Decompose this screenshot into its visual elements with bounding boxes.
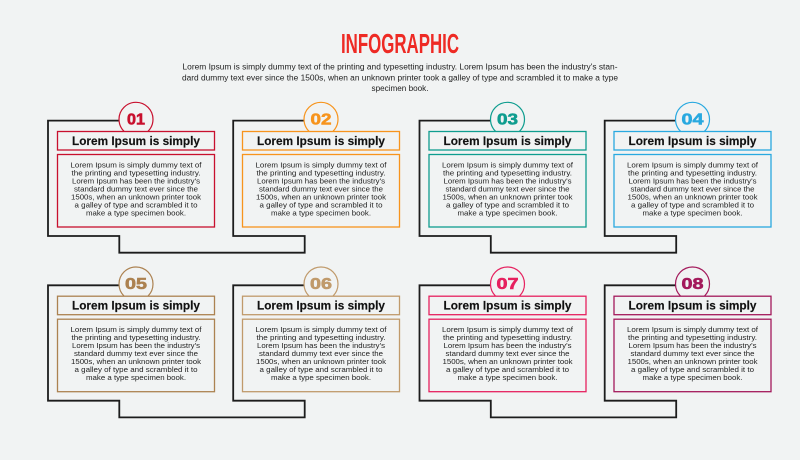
body box 04 (614, 154, 771, 227)
body box 08 (614, 319, 771, 392)
heading box 04: Lorem Ipsum is simply (628, 135, 757, 148)
body box 03: the printing and typesetting industry. (443, 168, 572, 178)
body box 01: 1500s, when an unknown printer took (71, 192, 201, 202)
body box 01: make a type specimen book. (86, 208, 186, 218)
body box 03: Lorem Ipsum has been the industry's (444, 176, 572, 186)
heading box 04 (614, 132, 771, 150)
card 01 (58, 102, 214, 227)
body box 04: make a type specimen book. (642, 208, 742, 218)
number badge 04 (676, 102, 710, 136)
connector: cards 01 and 02 (48, 121, 305, 253)
body box 06: make a type specimen book. (271, 373, 371, 382)
body box 06: a galley of type and scrambled it to (260, 365, 382, 374)
body box 01 (58, 154, 214, 227)
body box 06 (242, 319, 400, 392)
body box 02: 1500s, when an unknown printer took (256, 192, 386, 202)
number badge 05: 05 (125, 276, 147, 293)
number badge 08 (676, 267, 710, 301)
body box 04: 1500s, when an unknown printer took (628, 192, 758, 202)
body box 02: Lorem Ipsum is simply dummy text of (256, 160, 388, 170)
card 08 (614, 267, 771, 392)
body box 08: standard dummy text ever since the (630, 349, 754, 358)
card 04 (614, 102, 771, 227)
body box 07: the printing and typesetting industry. (443, 333, 572, 342)
heading box 06 (242, 296, 400, 315)
body box 06: Lorem Ipsum is simply dummy text of (256, 325, 388, 334)
heading box 08: Lorem Ipsum is simply (628, 300, 757, 313)
body box 05: standard dummy text ever since the (74, 349, 198, 358)
body box 01: Lorem Ipsum has been the industry's (72, 176, 200, 186)
connector: cards 03 and 04 (420, 121, 676, 253)
body box 05: Lorem Ipsum is simply dummy text of (70, 325, 203, 334)
body box 08: make a type specimen book. (642, 373, 742, 382)
body box 04: Lorem Ipsum is simply dummy text of (627, 160, 759, 170)
body box 08: 1500s, when an unknown printer took (628, 357, 758, 366)
body box 03: standard dummy text ever since the (446, 184, 570, 194)
body box 07 (429, 319, 586, 392)
connector: cards 07 and 08 (420, 285, 676, 417)
body box 01: the printing and typesetting industry. (72, 168, 200, 178)
body box 02: Lorem Ipsum has been the industry's (257, 176, 385, 186)
card 05 (58, 267, 214, 392)
body box 03 (429, 154, 586, 227)
number badge 08: 08 (682, 276, 704, 293)
body box 06: 1500s, when an unknown printer took (256, 357, 386, 366)
title: INFOGRAPHIC (341, 28, 459, 59)
number badge 07: 07 (496, 276, 519, 293)
number badge 04: 04 (682, 112, 704, 128)
body box 08: the printing and typesetting industry. (628, 333, 757, 342)
heading box 06: Lorem Ipsum is simply (257, 300, 386, 313)
number badge 06: 06 (310, 276, 332, 293)
card 02 (242, 102, 400, 227)
heading box 05 (58, 296, 214, 315)
number badge 06 (304, 267, 338, 301)
body box 02: the printing and typesetting industry. (256, 168, 386, 178)
heading box 02: Lorem Ipsum is simply (257, 135, 386, 148)
body box 03: Lorem Ipsum is simply dummy text of (442, 160, 574, 170)
heading box 01 (58, 132, 214, 150)
heading box 02 (242, 132, 400, 150)
body box 06: Lorem Ipsum has been the industry's (257, 341, 385, 350)
intro text: dard dummy text ever since the 1500s, when an unknown printer took a galley of type and scrambled it to make a type (182, 73, 619, 82)
body box 01: a galley of type and scrambled it to (74, 200, 198, 210)
body box 05 (58, 319, 214, 392)
body box 02: make a type specimen book. (271, 208, 371, 218)
number badge 02: 02 (310, 112, 332, 128)
body box 05: the printing and typesetting industry. (72, 333, 200, 342)
body box 03: a galley of type and scrambled it to (446, 200, 569, 210)
heading box 03: Lorem Ipsum is simply (444, 135, 572, 148)
heading box 07 (429, 296, 586, 315)
number badge 05 (119, 267, 153, 301)
body box 04: Lorem Ipsum has been the industry's (628, 176, 757, 186)
body box 05: 1500s, when an unknown printer took (71, 357, 201, 366)
body box 07: a galley of type and scrambled it to (446, 365, 569, 374)
body box 03: make a type specimen book. (458, 208, 558, 218)
number badge 03: 03 (497, 112, 518, 128)
number badge 03 (490, 102, 524, 136)
heading box 07: Lorem Ipsum is simply (444, 300, 572, 313)
body box 01: standard dummy text ever since the (74, 184, 198, 194)
heading box 03 (429, 132, 586, 150)
body box 07: Lorem Ipsum is simply dummy text of (442, 325, 574, 334)
card 03 (429, 102, 586, 227)
body box 08: a galley of type and scrambled it to (631, 365, 754, 374)
card 07 (429, 267, 586, 392)
body box 05: Lorem Ipsum has been the industry's (72, 341, 200, 350)
body box 06: the printing and typesetting industry. (256, 333, 386, 342)
body box 07: 1500s, when an unknown printer took (442, 357, 573, 366)
body box 04: the printing and typesetting industry. (628, 168, 757, 178)
intro text (182, 62, 619, 93)
number badge 01 (119, 102, 153, 136)
intro text: Lorem Ipsum is simply dummy text of the printing and typesetting industry. Lorem Ipsum has been the industry's stan- (182, 62, 618, 72)
card 06 (242, 267, 400, 392)
body box 02 (242, 154, 400, 227)
number badge 01: 01 (127, 112, 145, 128)
connector: cards 05 and 06 (48, 285, 305, 417)
body box 07: make a type specimen book. (458, 373, 558, 382)
body box 05: a galley of type and scrambled it to (74, 365, 198, 374)
body box 06: standard dummy text ever since the (259, 349, 383, 358)
intro text: specimen book. (372, 84, 428, 93)
heading box 08 (614, 296, 771, 315)
body box 07: standard dummy text ever since the (446, 349, 570, 358)
body box 03: 1500s, when an unknown printer took (442, 192, 573, 202)
heading box 05: Lorem Ipsum is simply (72, 300, 201, 313)
body box 02: a galley of type and scrambled it to (260, 200, 382, 210)
number badge 02 (304, 102, 338, 136)
body box 08: Lorem Ipsum is simply dummy text of (627, 325, 759, 334)
body box 01: Lorem Ipsum is simply dummy text of (70, 160, 203, 170)
heading box 01: Lorem Ipsum is simply (72, 135, 201, 148)
number badge 07 (490, 267, 524, 301)
body box 07: Lorem Ipsum has been the industry's (444, 341, 572, 350)
body box 02: standard dummy text ever since the (259, 184, 383, 194)
body box 04: a galley of type and scrambled it to (631, 200, 754, 210)
body box 04: standard dummy text ever since the (630, 184, 754, 194)
body box 05: make a type specimen book. (86, 373, 186, 382)
body box 08: Lorem Ipsum has been the industry's (628, 341, 757, 350)
